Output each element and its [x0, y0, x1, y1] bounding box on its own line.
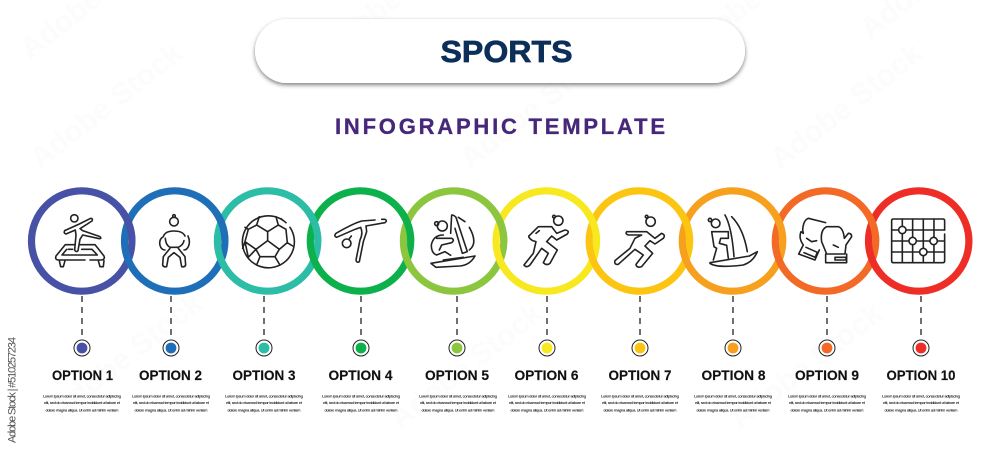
- connector 1: [81, 296, 83, 340]
- body text 7: dolore magna aliqua. Ut enim ad minim veniam: [604, 408, 677, 412]
- text: Adobe Stock: [384, 296, 549, 436]
- connector 5: [456, 296, 458, 340]
- connector 4: [360, 296, 362, 340]
- body text 8: elit, sed do eiusmod tempor incididunt ut labore et: [695, 400, 772, 405]
- option 2: [132, 215, 210, 412]
- body text 4: Lorem ipsum dolor sit amet, consectetur adipiscing: [322, 394, 400, 398]
- body text 2: elit, sed do eiusmod tempor incididunt ut labore et: [133, 400, 210, 405]
- body text 4: [322, 394, 400, 412]
- icon: soccer ball: [242, 216, 294, 268]
- body text 3: dolore magna aliqua. Ut enim ad minim veniam: [228, 408, 301, 412]
- icon: boxing gloves: [799, 218, 852, 263]
- option 10: [882, 219, 960, 412]
- body text 2: Lorem ipsum dolor sit amet, consectetur adipiscing: [132, 394, 210, 398]
- dot 7: [632, 340, 648, 356]
- vertical stock credit: Adobe Stock | #510257234: [6, 337, 18, 443]
- ring 4: [310, 191, 411, 291]
- ring 9: [775, 191, 876, 291]
- body text 9: [788, 394, 866, 412]
- body text 3: [225, 394, 303, 412]
- title: SPORTS: SPORTS: [440, 34, 572, 69]
- body text 4: elit, sed do eiusmod tempor incididunt ut labore et: [323, 400, 400, 405]
- connector 8: [732, 296, 734, 340]
- body text 9: elit, sed do eiusmod tempor incididunt ut labore et: [789, 400, 866, 405]
- connector 6: [546, 296, 548, 340]
- ring 1: [31, 191, 132, 291]
- label 1: OPTION 1: [52, 368, 113, 383]
- label 4: OPTION 4: [328, 368, 393, 383]
- text: Adobe Stock: [764, 36, 929, 176]
- connector 2: [170, 296, 172, 340]
- ring 10: [868, 191, 969, 291]
- body text 5: [419, 394, 497, 412]
- dot 3: [256, 340, 272, 356]
- icon: rhythmic gymnast: [335, 219, 386, 262]
- body text 7: elit, sed do eiusmod tempor incididunt ut labore et: [602, 400, 679, 405]
- dot 4: [353, 340, 369, 356]
- body text 2: dolore magna aliqua. Ut enim ad minim veniam: [134, 408, 208, 412]
- body text 6: dolore magna aliqua. Ut enim ad minim veniam: [510, 408, 584, 412]
- body text 10: elit, sed do eiusmod tempor incididunt ut labore et: [883, 400, 960, 405]
- connector 3: [263, 296, 265, 340]
- label 2: OPTION 2: [139, 368, 202, 383]
- icon: sailing: [431, 215, 475, 267]
- label 7: OPTION 7: [608, 368, 672, 383]
- label 3: OPTION 3: [232, 368, 296, 383]
- label 8: OPTION 8: [702, 368, 766, 383]
- body text 1: dolore magna aliqua. Ut enim ad minim veniam: [46, 408, 119, 412]
- option 4: [322, 219, 400, 412]
- ring 7: [589, 191, 690, 291]
- text: Adobe Stock: [44, 286, 209, 426]
- ring 8: [682, 191, 783, 291]
- body text 9: Lorem ipsum dolor sit amet, consectetur adipiscing: [788, 394, 866, 398]
- body text 6: elit, sed do eiusmod tempor incididunt ut labore et: [509, 400, 586, 405]
- icon: data grid: [892, 219, 945, 263]
- icon: trampoline jumper: [56, 215, 104, 267]
- subtitle: infographic template: INFOGRAPHIC TEMPLATE: [335, 114, 665, 139]
- body text 10: Lorem ipsum dolor sit amet, consectetur adipiscing: [882, 394, 960, 398]
- body text 4: dolore magna aliqua. Ut enim ad minim veniam: [324, 408, 398, 412]
- body text 5: elit, sed do eiusmod tempor incididunt ut labore et: [420, 400, 497, 405]
- label 9: OPTION 9: [795, 368, 859, 383]
- dot 2: [163, 340, 179, 356]
- icon: runner: [524, 215, 568, 267]
- body text 3: Lorem ipsum dolor sit amet, consectetur adipiscing: [225, 394, 303, 398]
- option 9: [788, 218, 866, 412]
- icon: windsurfer: [708, 215, 757, 266]
- connector 9: [826, 296, 828, 340]
- body text 1: elit, sed do eiusmod tempor incididunt ut labore et: [44, 400, 121, 405]
- body text 5: dolore magna aliqua. Ut enim ad minim veniam: [422, 408, 495, 412]
- label 10: OPTION 10: [886, 368, 956, 383]
- body text 8: [694, 394, 772, 412]
- body text 7: Lorem ipsum dolor sit amet, consectetur adipiscing: [601, 394, 679, 398]
- interlocking rings: [31, 191, 969, 291]
- body text 9: dolore magna aliqua. Ut enim ad minim veniam: [790, 408, 864, 412]
- body text 10: [882, 394, 960, 412]
- option 6: [508, 215, 586, 412]
- body text 7: [601, 394, 679, 412]
- ring 2: [124, 191, 225, 291]
- ring 6: [496, 191, 596, 291]
- body text 5: Lorem ipsum dolor sit amet, consectetur adipiscing: [419, 394, 497, 398]
- body text 1: Lorem ipsum dolor sit amet, consectetur adipiscing: [43, 394, 121, 398]
- text: Adobe Stock: [724, 296, 889, 436]
- ring 5: [403, 191, 504, 291]
- icon: sprinter: [615, 215, 664, 267]
- connector 10: [920, 296, 922, 340]
- dot 1: [74, 340, 90, 356]
- body text 1: [43, 394, 121, 412]
- text: Adobe Stock: [454, 36, 619, 176]
- body text 8: dolore magna aliqua. Ut enim ad minim veniam: [696, 408, 770, 412]
- option 8: [694, 215, 772, 412]
- connector 7: [639, 296, 641, 340]
- text: Adobe Stock: [24, 36, 189, 176]
- dot 5: [449, 340, 465, 356]
- dot 8: [725, 340, 741, 356]
- ring 3: [217, 191, 318, 291]
- body text 2: [132, 394, 210, 412]
- dot 6: [539, 340, 555, 356]
- body text 3: elit, sed do eiusmod tempor incididunt ut labore et: [226, 400, 303, 405]
- icon: sumo wrestler: [160, 215, 189, 267]
- body text 8: Lorem ipsum dolor sit amet, consectetur adipiscing: [694, 394, 772, 398]
- title pill: [255, 19, 745, 83]
- label 5: OPTION 5: [425, 368, 489, 383]
- dot 9: [819, 340, 835, 356]
- option 7: [601, 215, 679, 412]
- option 3: [225, 216, 303, 412]
- option 1: [43, 215, 121, 412]
- label 6: OPTION 6: [514, 368, 579, 383]
- body text 10: dolore magna aliqua. Ut enim ad minim veniam: [884, 408, 958, 412]
- body text 6: Lorem ipsum dolor sit amet, consectetur adipiscing: [508, 394, 586, 398]
- dot 10: [913, 340, 929, 356]
- body text 6: [508, 394, 586, 412]
- option 5: [419, 215, 497, 412]
